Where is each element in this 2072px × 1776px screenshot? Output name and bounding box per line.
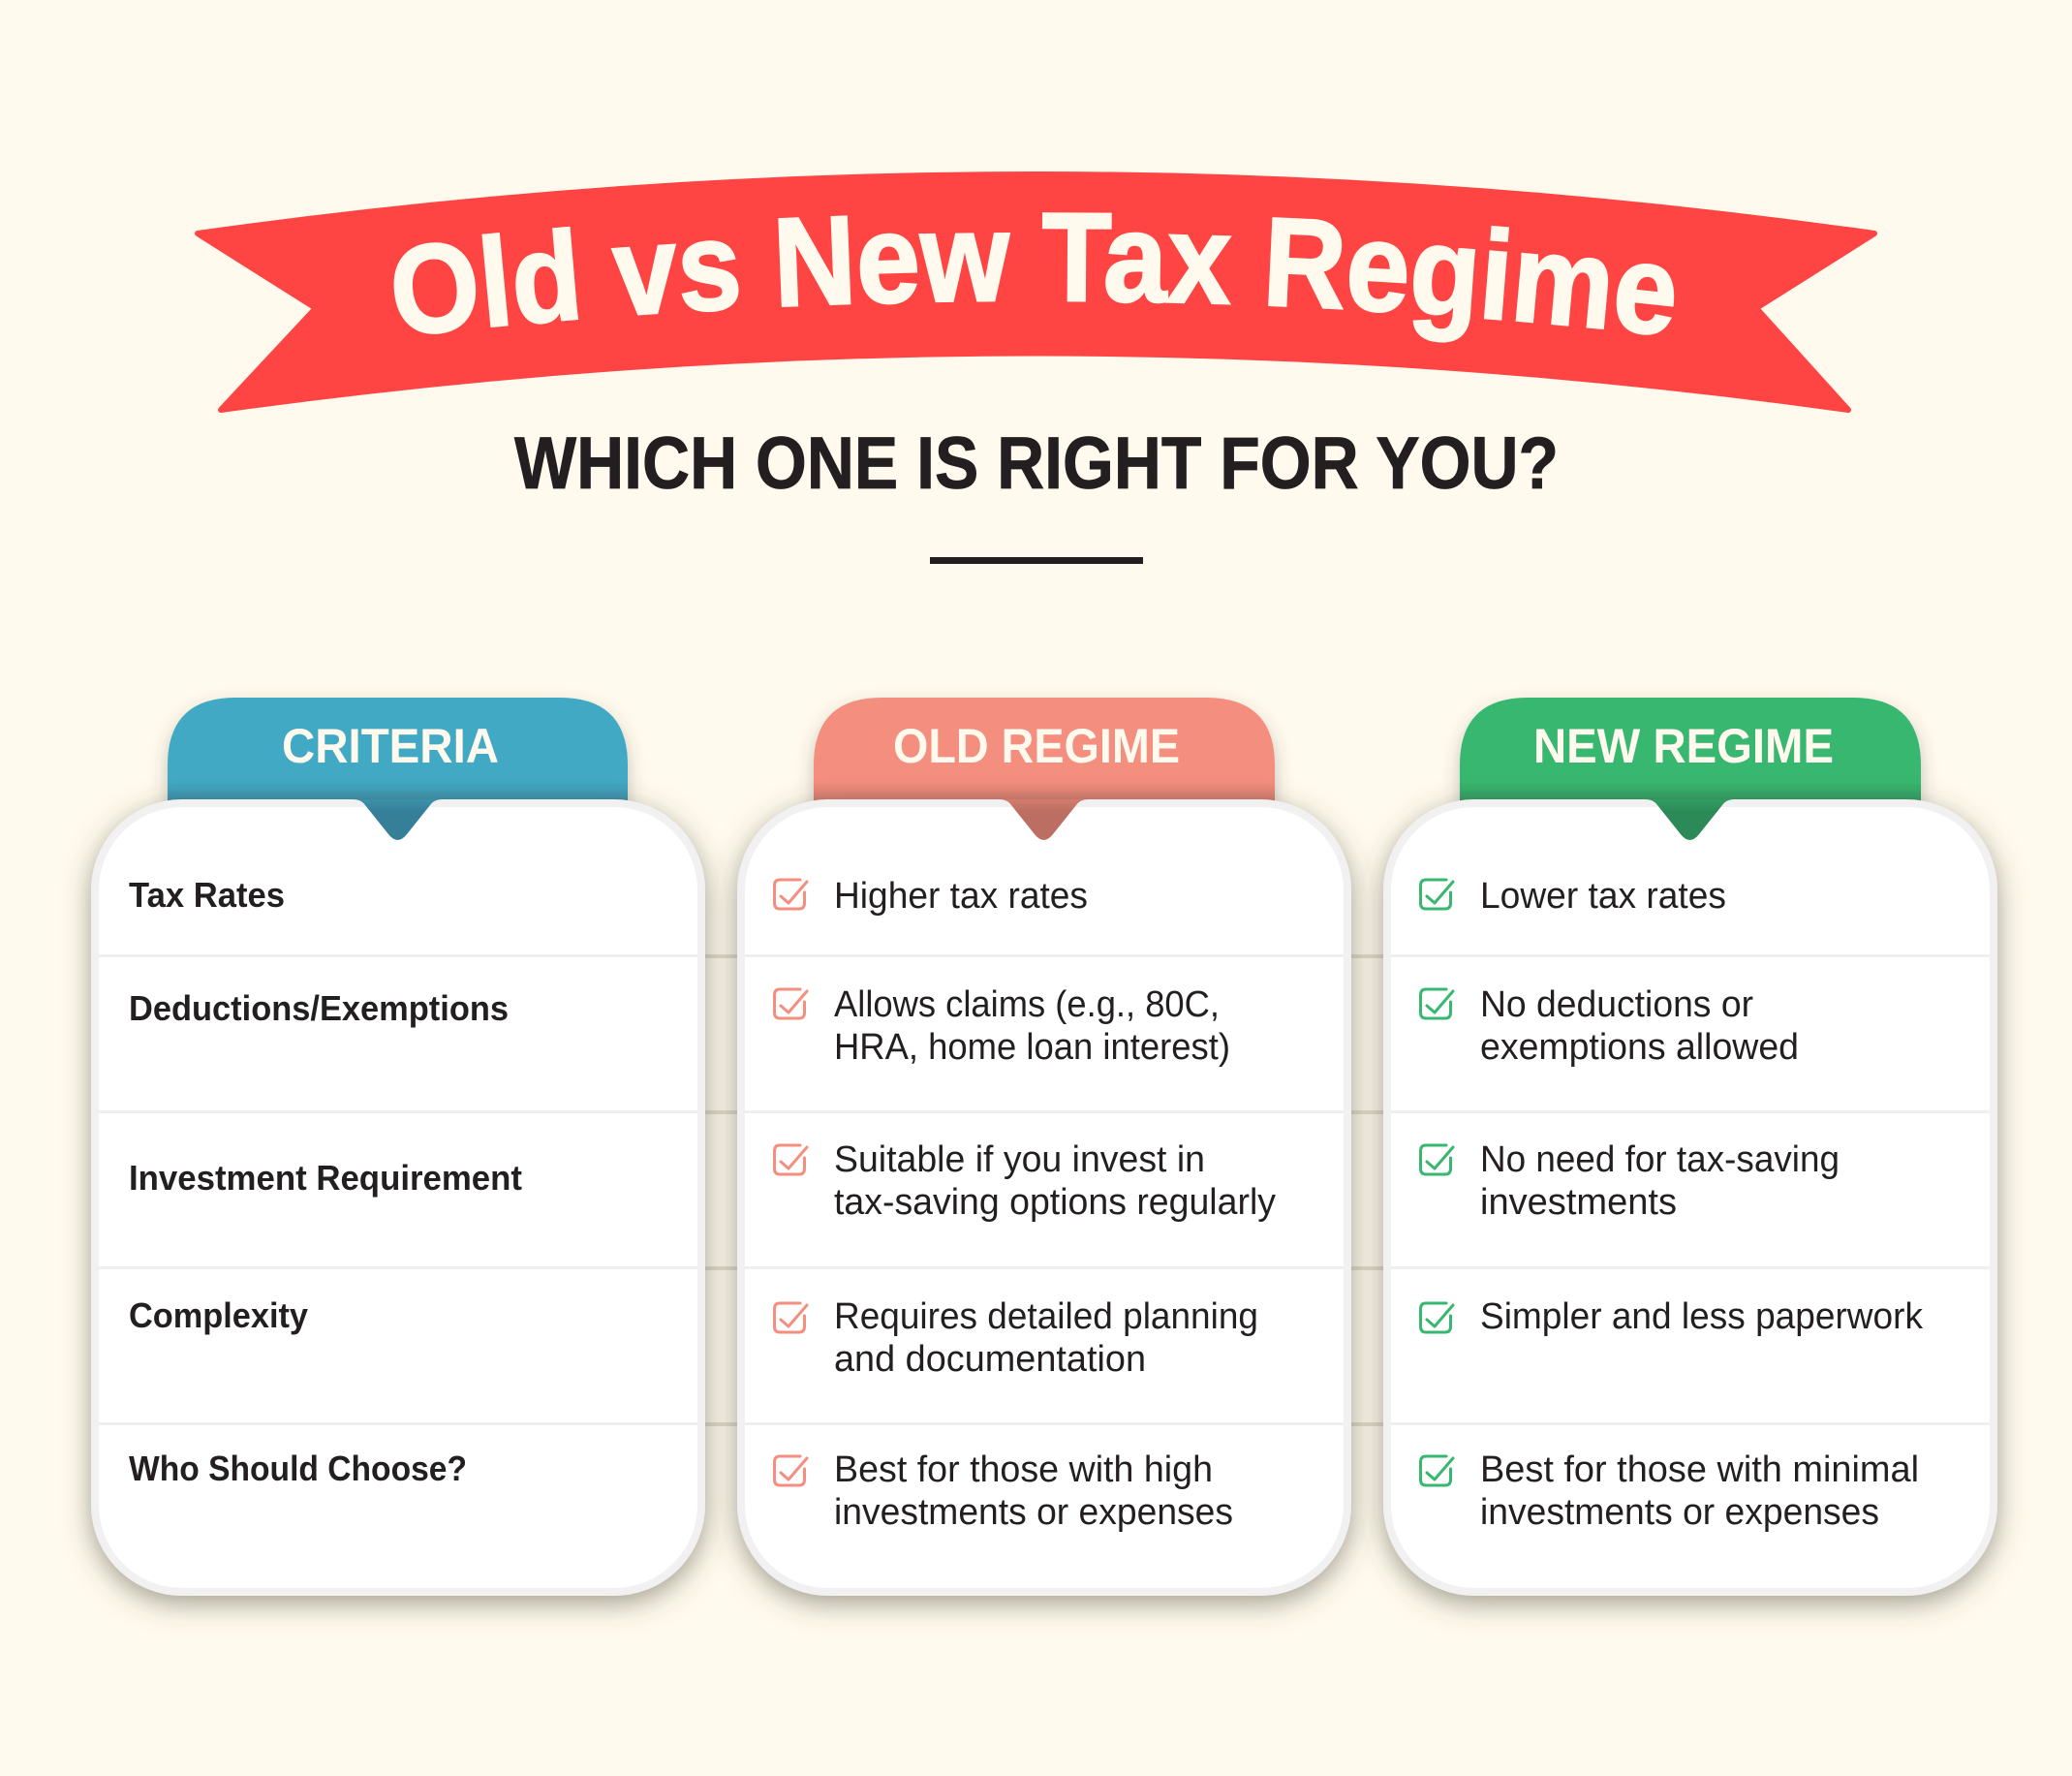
row: complexity: and documentation [834, 1339, 1146, 1380]
banner ribbon [198, 174, 1874, 410]
icon: check [775, 1303, 807, 1332]
title: Old vs New Tax Regime [393, 212, 1674, 343]
row: investment [1420, 1139, 1840, 1223]
new regime card [1387, 803, 1994, 1592]
title divider [930, 557, 1143, 564]
row: who: investments or expenses [1480, 1492, 1879, 1533]
row: who: Best for those with high [834, 1449, 1213, 1490]
criteria card [95, 803, 701, 1592]
new regime header tab [1460, 698, 1921, 804]
row: who [775, 1449, 1233, 1533]
old regime card [741, 803, 1347, 1592]
row label: investment: Investment Requirement [129, 1158, 522, 1198]
criteria header tab [168, 698, 628, 804]
row: deductions: exemptions allowed [1480, 1027, 1799, 1068]
row label: complexity: Complexity [129, 1295, 308, 1335]
icon: check [1420, 989, 1453, 1018]
old regime notch [999, 799, 1089, 840]
old regime heading: OLD REGIME [893, 719, 1180, 773]
row: investment: Suitable if you invest in [834, 1139, 1205, 1180]
row: investment [775, 1139, 1276, 1223]
title banner [195, 171, 1877, 413]
row: investment: No need for tax-saving [1480, 1139, 1840, 1180]
row: deductions [1420, 984, 1799, 1068]
row: tax rates: Lower tax rates [1480, 876, 1726, 917]
row: who: Best for those with minimal [1480, 1449, 1919, 1490]
old regime header tab [814, 698, 1275, 804]
row: who: investments or expenses [834, 1492, 1233, 1533]
row: deductions: HRA, home loan interest) [834, 1027, 1230, 1068]
panel: criteria [95, 698, 701, 1592]
icon: check [1420, 1456, 1453, 1485]
icon: check [1420, 1303, 1453, 1332]
row: deductions: Allows claims (e.g., 80C, [834, 984, 1220, 1025]
new regime notch [1645, 799, 1735, 840]
row: complexity: Simpler and less paperwork [1480, 1296, 1924, 1337]
icon: check [775, 989, 807, 1018]
row: who [1420, 1449, 1919, 1533]
panel: old regime [741, 698, 1347, 1592]
icon: check [775, 1456, 807, 1485]
new regime heading: NEW REGIME [1533, 719, 1834, 773]
criteria heading: CRITERIA [282, 719, 499, 773]
row label: who: Who Should Choose? [129, 1449, 467, 1488]
row label: tax rates: Tax Rates [129, 875, 285, 915]
row: complexity [775, 1296, 1258, 1380]
row: investment: tax-saving options regularly [834, 1182, 1276, 1223]
subtitle: WHICH ONE IS RIGHT FOR YOU? [514, 422, 1559, 505]
panel: new regime [1387, 698, 1994, 1592]
icon: check [775, 880, 807, 909]
row: deductions: No deductions or [1480, 984, 1753, 1025]
row: investment: investments [1480, 1182, 1677, 1223]
icon: check [1420, 1145, 1453, 1174]
row: complexity: Requires detailed planning [834, 1296, 1258, 1337]
criteria notch [353, 799, 443, 840]
row: tax rates: Higher tax rates [834, 876, 1088, 917]
icon: check [775, 1145, 807, 1174]
icon: check [1420, 880, 1453, 909]
row: deductions [775, 984, 1230, 1068]
gap row lines [705, 954, 1383, 1426]
row label: deductions: Deductions/Exemptions [129, 988, 509, 1028]
